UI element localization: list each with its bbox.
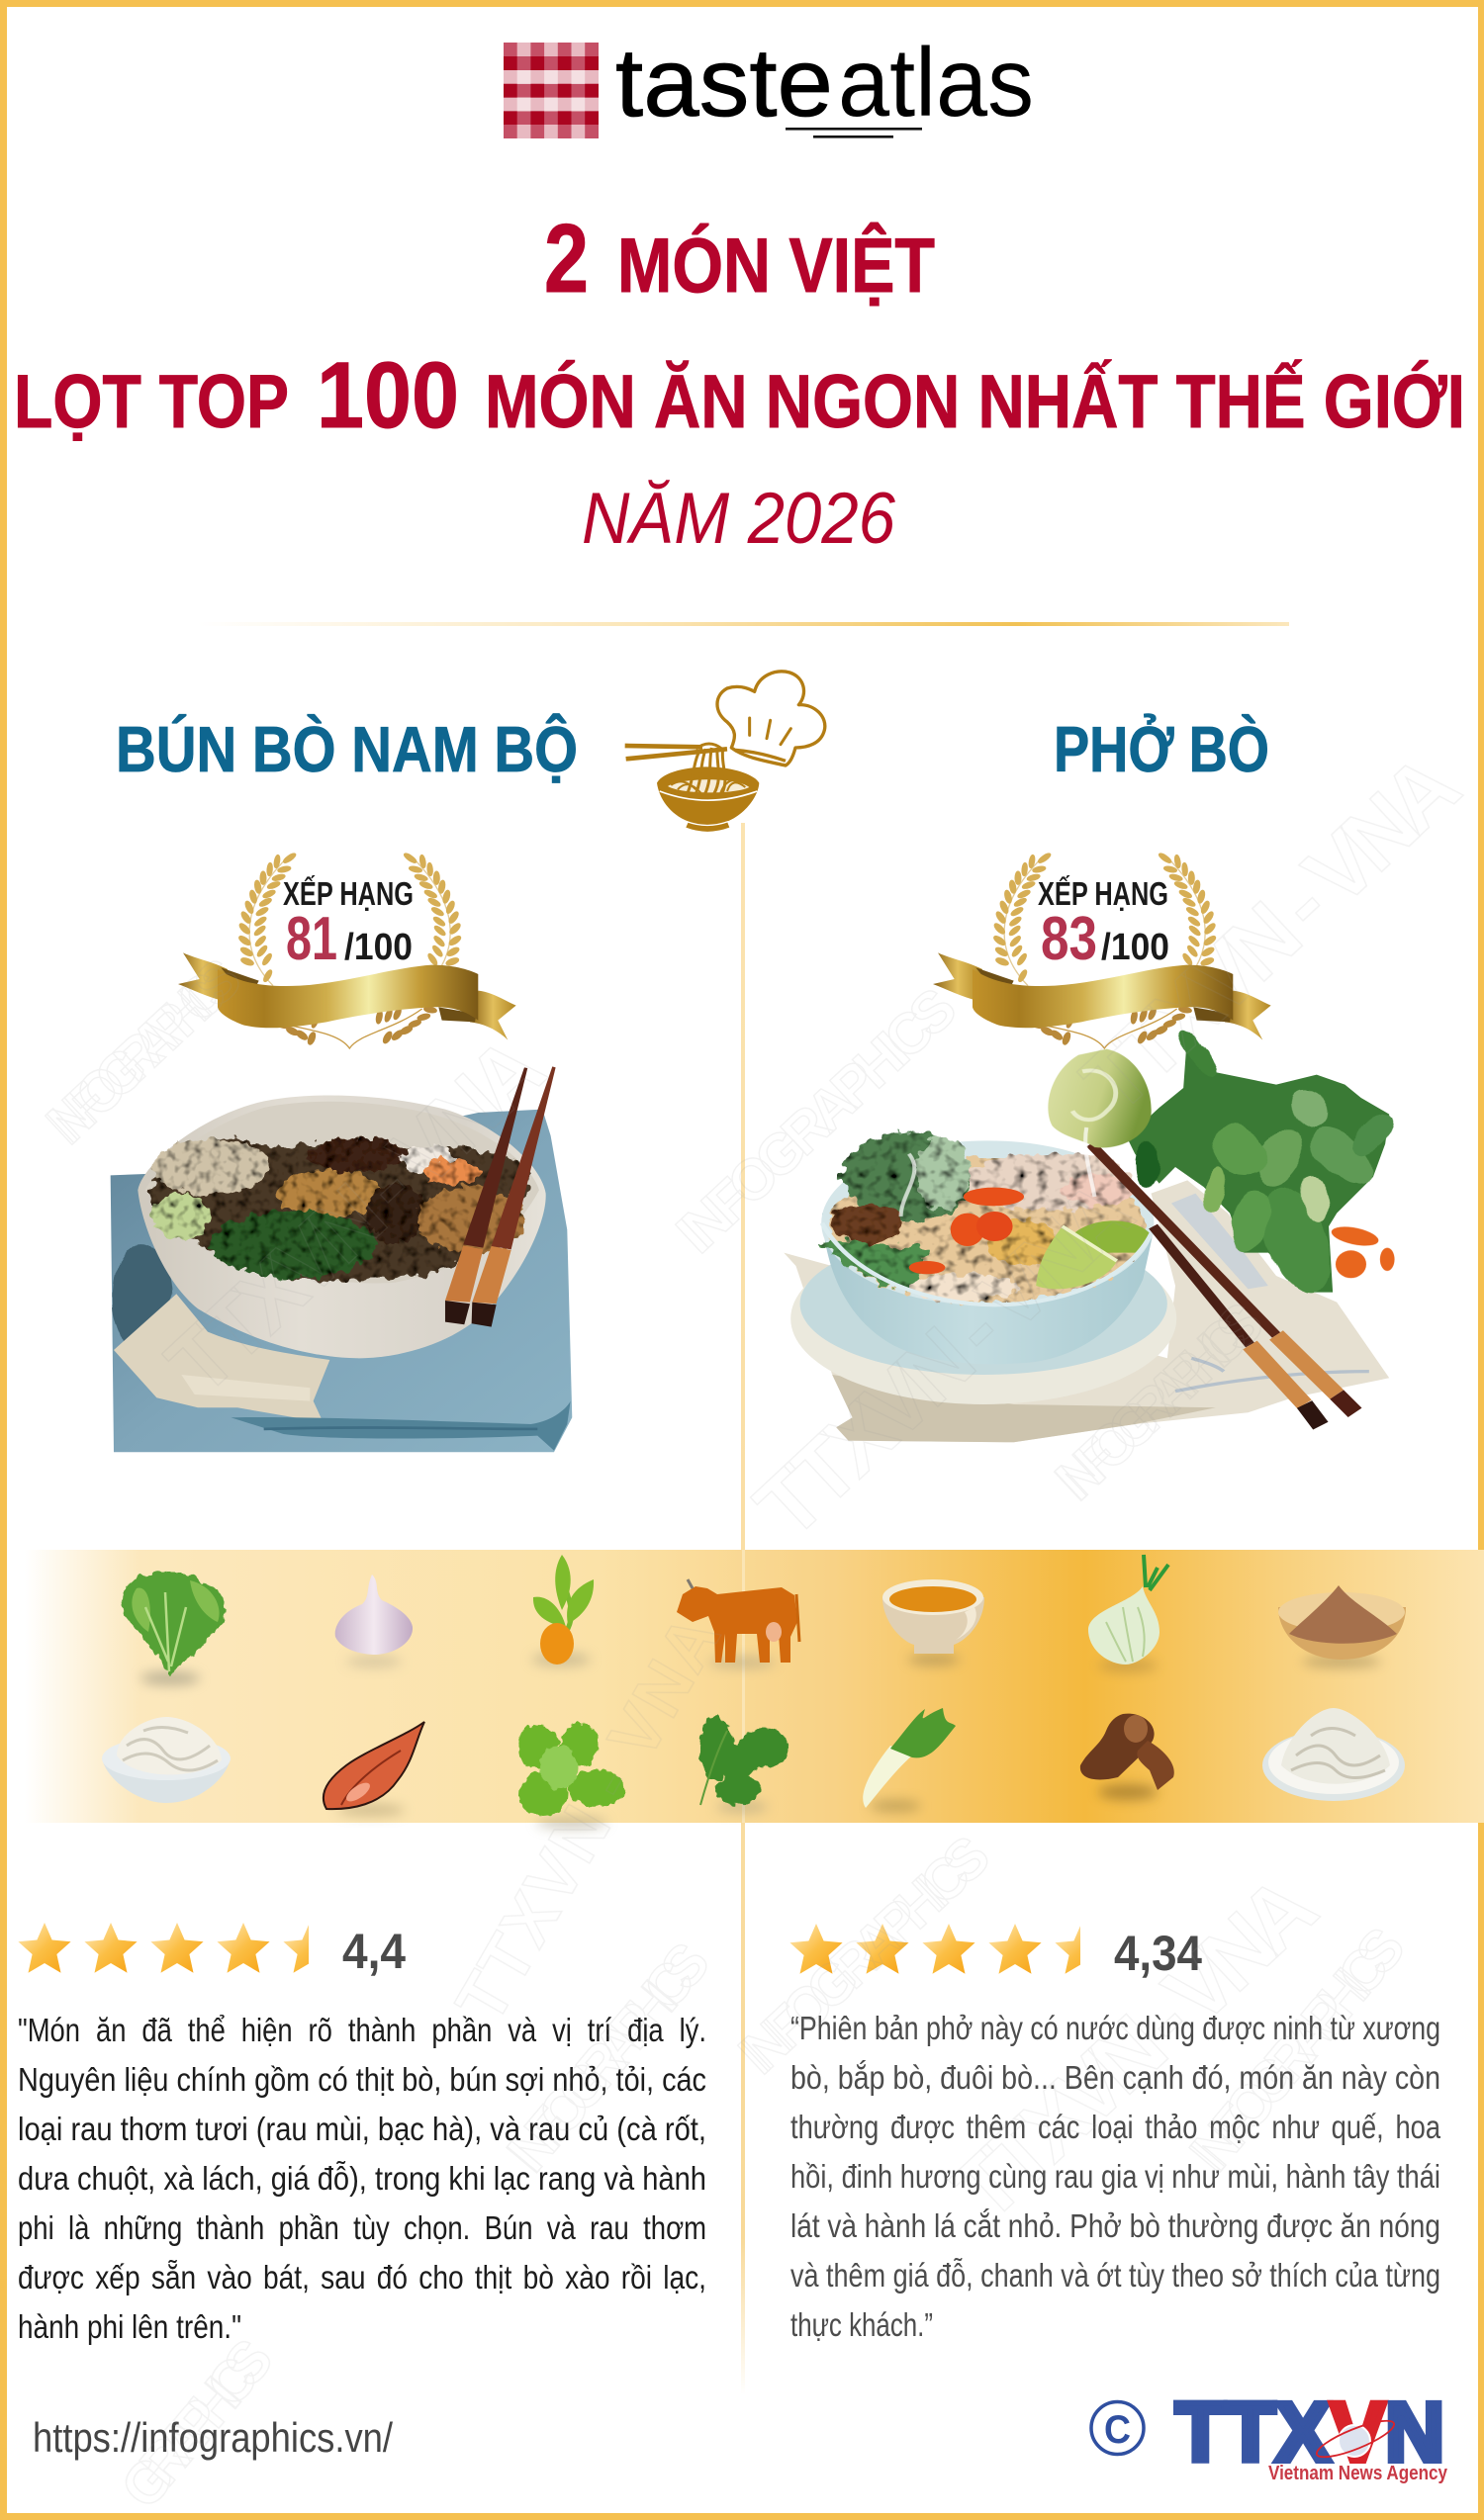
infographic canvas: TTXVN - VNA — [1064, 736, 1479, 1132]
description: bún bò nam bộ: "Món ăn đã thể hiện rõ thành phần và vị trí địa lý. — [18, 2012, 706, 2048]
title: LỌT TOP — [14, 360, 289, 444]
heading: bún bò nam bộ: BÚN BÒ NAM BỘ — [116, 713, 578, 785]
heading: phở bò: PHỞ BÒ — [1054, 713, 1269, 785]
infographic canvas: TTXVN - VNA — [440, 1602, 735, 2035]
description: bún bò nam bộ: phi là những thành phần tùy chọn. Bún và rau thơm — [18, 2209, 706, 2246]
badge: rank 83 — [933, 853, 1271, 1048]
icon: shallot — [324, 1722, 424, 1816]
infographic canvas: INFOGRAPHICS — [727, 1824, 1002, 2087]
icon: broth cup — [882, 1579, 984, 1665]
description: phở bò — [790, 2010, 1441, 2343]
rating: left stars — [18, 1923, 336, 1973]
infographic canvas: INFOGRAPHICS — [35, 946, 253, 1157]
copyright mark — [1091, 2401, 1144, 2455]
logo: tasteatlas: taste — [615, 28, 833, 136]
rating value: 4,34: 4,34 — [1114, 1926, 1202, 1981]
center divider line — [741, 823, 745, 2395]
icon: cow — [677, 1579, 799, 1668]
copyright mark: C — [1104, 2408, 1131, 2452]
gold divider — [198, 622, 1289, 626]
icon: garlic — [335, 1575, 413, 1667]
infographic canvas: TTXVN - VNA — [935, 1857, 1336, 2240]
title: 100 — [317, 343, 459, 448]
logo: tasteatlas: atlas — [838, 28, 1034, 136]
icon: mint — [517, 1724, 625, 1829]
description: bún bò nam bộ: loại rau thơm tươi (rau mùi, bạc hà), và rau củ (cà rốt, — [18, 2111, 706, 2147]
rank text: /100 — [344, 927, 413, 968]
infographic canvas: INFOGRAPHICS — [665, 975, 969, 1266]
rank text — [1038, 875, 1169, 973]
photo: bún bò nam bộ bowl — [111, 1066, 572, 1452]
logo: tasteatlas — [504, 28, 1034, 138]
title: MÓN VIỆT — [617, 222, 935, 309]
description: bún bò nam bộ — [18, 2012, 706, 2345]
description: bún bò nam bộ: Nguyên liệu chính gồm có thịt bò, bún sợi nhỏ, tỏi, các — [18, 2061, 706, 2098]
rating: right stars — [789, 1924, 1108, 1974]
icon: noodle bowl — [102, 1717, 231, 1803]
icon: chef hat and noodle bowl — [625, 672, 825, 832]
rank text — [283, 875, 414, 973]
description: bún bò nam bộ: được xếp sẵn vào bát, sau đó cho thịt bò xào rồi lạc, — [18, 2259, 706, 2295]
description: bún bò nam bộ: hành phi lên trên." — [18, 2308, 241, 2345]
infographic canvas: TTXVN - VNA — [737, 1161, 1153, 1558]
rank text: XẾP HẠNG — [1038, 875, 1168, 912]
photo: phở bò bowl — [784, 1028, 1400, 1442]
rank text: 83 — [1041, 905, 1097, 973]
infographic canvas: INFOGRAPHICS — [1044, 1290, 1276, 1513]
infographic canvas: INFOGRAPHICS — [1177, 1916, 1418, 2184]
infographic canvas: INFOGRAPHICS — [495, 1931, 722, 2184]
icon: sprout — [531, 1555, 594, 1666]
rank text: /100 — [1101, 927, 1169, 968]
icon: onion — [1088, 1555, 1168, 1672]
infographic canvas: GRAPHICS — [109, 2327, 286, 2520]
icon: lettuce — [121, 1572, 226, 1685]
infographic canvas: TTXVN - VNA — [148, 1018, 564, 1414]
description: phở bò: thực khách.” — [790, 2306, 933, 2343]
ingredients band — [7, 1550, 1484, 1829]
rank text: XẾP HẠNG — [283, 875, 414, 912]
title: 2 — [544, 204, 589, 313]
rating value: 4,4: 4,4 — [342, 1924, 406, 1979]
logo: TTXVN: TTXVN — [1175, 2385, 1444, 2478]
badge: rank 81 — [178, 853, 516, 1048]
icon: scallion — [863, 1708, 956, 1812]
description: bún bò nam bộ: dưa chuột, xà lách, giá đỗ), trong khi lạc rang và hành — [18, 2160, 706, 2197]
title: NĂM 2026 — [582, 479, 895, 559]
rank text: 81 — [286, 905, 337, 973]
icon: cloves — [1080, 1714, 1174, 1800]
icon: spice powder bowl — [1278, 1585, 1406, 1667]
logo: TTXVN: Vietnam News Agency — [1268, 2463, 1448, 2484]
icon: parsley — [699, 1716, 789, 1813]
title — [14, 204, 1465, 559]
source url: https://infographics.vn/ — [33, 2414, 393, 2461]
icon: noodle plate — [1262, 1708, 1405, 1801]
